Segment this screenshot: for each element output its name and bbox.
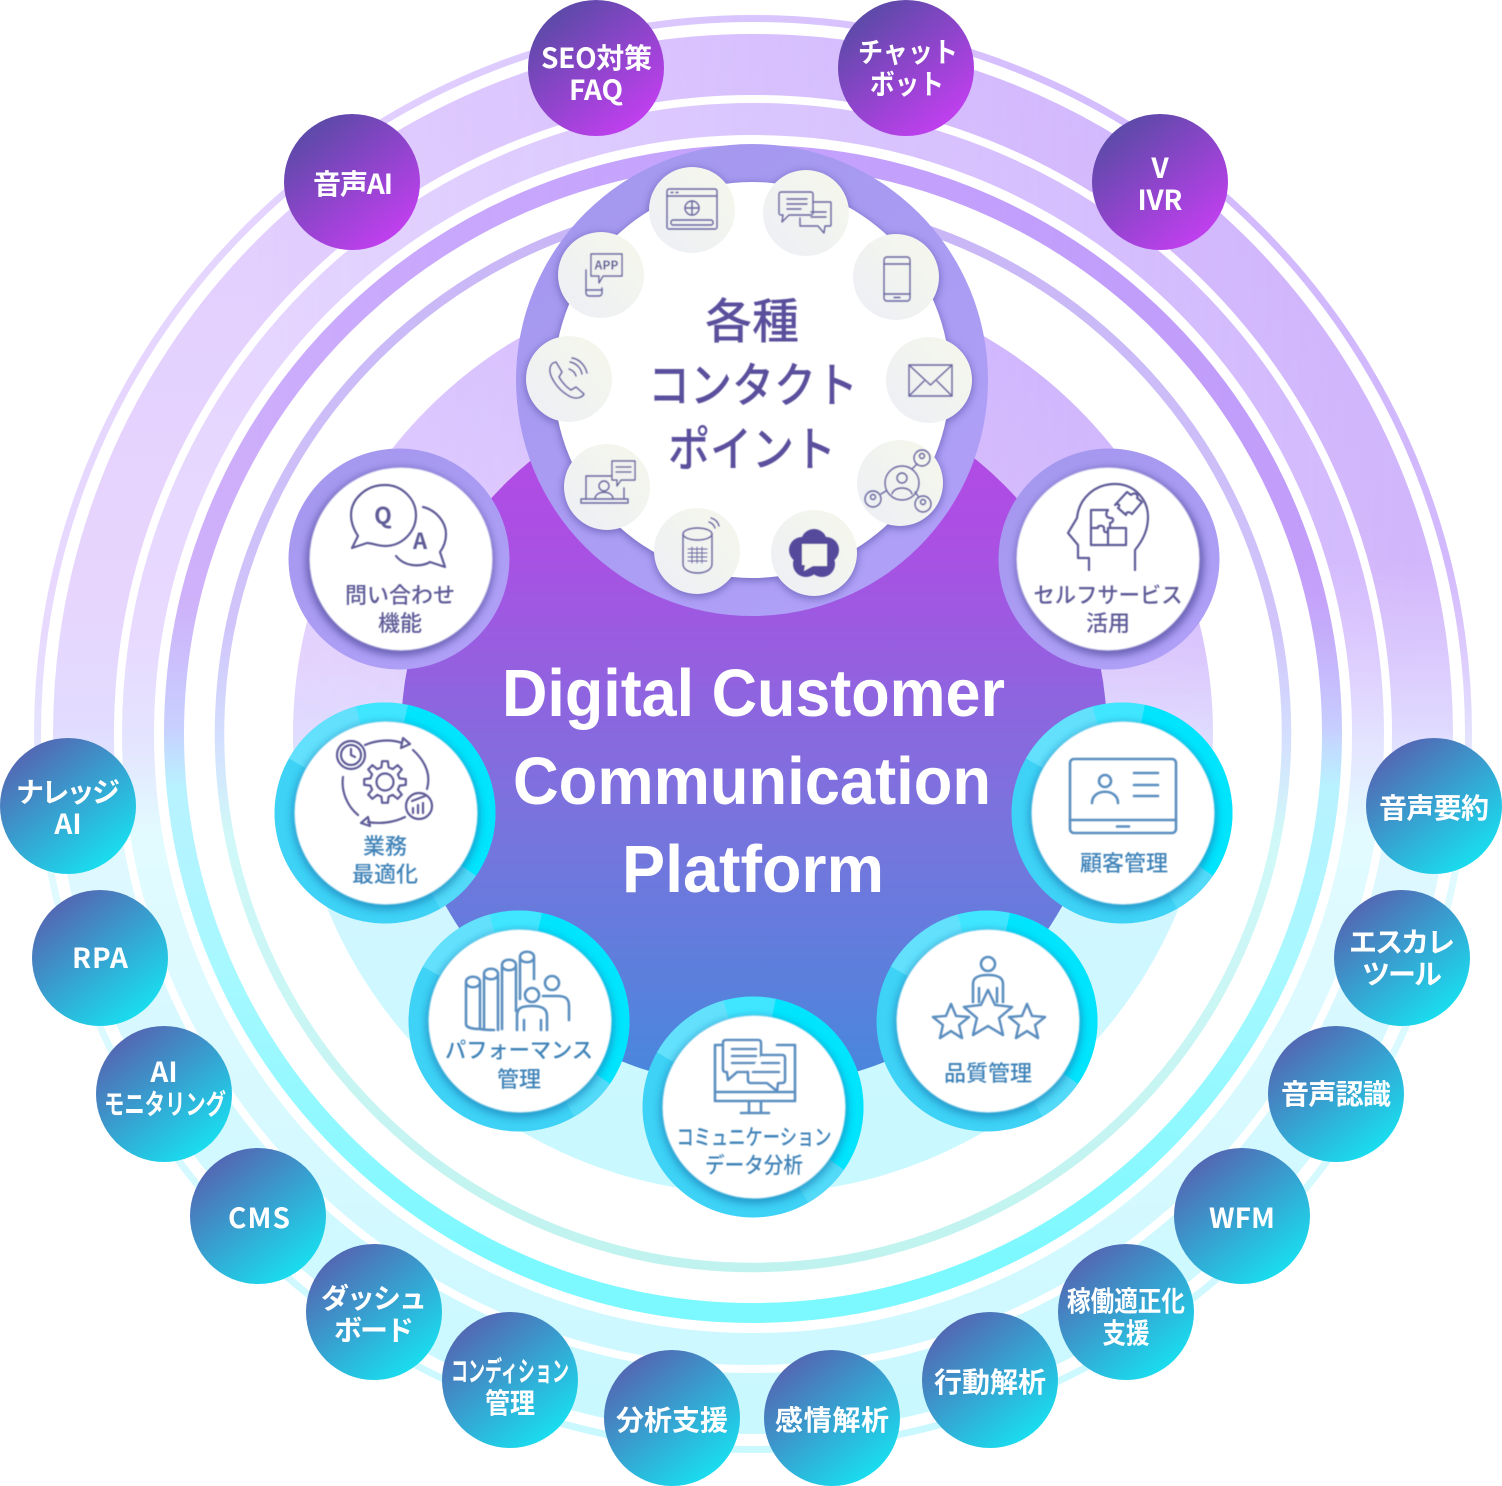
label: performance management: パフォーマンス [445,1033,593,1065]
icon: customer record monitor [1070,759,1176,833]
icon: web browser [667,189,717,229]
node: RPA: RPA [72,937,129,977]
icon: person with three stars [933,957,1045,1038]
icon: telephone [550,358,587,398]
title: Digital Customer Communication Platform: Digital Customer [502,656,1005,731]
module: customer management [981,672,1263,954]
label: self service: セルフサービス [1034,578,1182,610]
icon: bars with people [466,952,569,1030]
node: V IVR [1092,114,1228,250]
node: speech recognition [1268,1026,1404,1162]
label: operations optimisation: 最適化 [352,857,418,889]
node: CMS: CMS [228,1197,290,1237]
node: dashboard: ボード [334,1309,414,1349]
module: performance management [378,880,660,1162]
label: performance management: 管理 [497,1062,541,1094]
icon: monitor with chat bubbles [715,1040,795,1113]
node: escalation tool [1334,890,1470,1026]
pale inner disk [293,274,1213,1194]
node: RPA [32,890,168,1026]
node: condition management: コンディション [451,1350,569,1390]
node: V IVR: V [1150,147,1169,187]
contact points heading: 各種 [705,282,799,352]
node: workforce optimisation support: 稼働適正化 [1067,1280,1185,1320]
icon: smart speaker [683,518,719,573]
icon: chat bubbles [779,192,831,233]
label: inquiry: 問い合わせ [345,578,455,610]
node: knowledge AI [0,738,136,874]
module: operations optimisation [244,672,526,954]
central platform disk [401,381,1107,1087]
icon: mobile app [586,254,622,296]
label: self service: 活用 [1086,606,1130,638]
module: communication data analysis [612,966,894,1248]
module: self service [998,448,1220,670]
node: dashboard [306,1244,442,1380]
icon: Q and A bubbles [351,485,446,567]
node: chatbot: チャット [858,31,958,71]
node: AI monitoring: モニタリング [104,1083,226,1123]
node: V IVR: IVR [1138,179,1182,219]
node: chatbot: ボット [870,63,944,103]
label: operations optimisation: 業務 [363,829,407,861]
node: chatbot [838,0,974,136]
label: quality management: 品質管理 [944,1056,1032,1088]
node: analysis support: 分析支援 [616,1399,728,1439]
node: workforce optimisation support: 支援 [1102,1312,1150,1352]
node: SEO FAQ: SEO対策 [541,37,652,77]
icon: gear cycle [337,738,432,826]
icon: social network [865,450,931,512]
icon: head with puzzle [1068,484,1148,570]
node: SEO FAQ [528,0,664,136]
node: escalation tool: エスカレ [1349,921,1455,961]
node: speech summary: 音声要約 [1379,787,1489,827]
title: Digital Customer Communication Platform: Communication [513,744,991,819]
node: SEO FAQ: FAQ [569,69,623,109]
label: operations optimisation [352,829,418,889]
title: Digital Customer Communication Platform [502,656,1005,907]
icon: video call [581,461,635,503]
node: condition management: 管理 [485,1382,535,1422]
icon: mobile app: APP [594,256,618,274]
icon: smartphone [884,257,910,301]
node: knowledge AI: ナレッジ [16,771,120,811]
node: voice AI: 音声AI [313,163,393,203]
label: communication data analysis [676,1120,832,1180]
title: Digital Customer Communication Platform: Platform [622,832,884,907]
panel: contact points [516,144,988,616]
label: communication data analysis: コミュニケーション [676,1120,832,1152]
node: sentiment analysis [764,1350,900,1486]
icon: envelope [909,365,952,396]
node: escalation tool: ツール [1362,953,1442,993]
node: condition management [442,1312,578,1448]
contact points heading: ポイント [668,410,836,480]
node: sentiment analysis: 感情解析 [775,1399,889,1439]
node: dashboard: ダッシュ [321,1277,427,1317]
icon: LINE style flower speech bubble [789,529,839,577]
module: inquiry [288,448,510,670]
label: inquiry: 機能 [378,606,422,638]
node: workforce optimisation support [1058,1244,1194,1380]
icon: Q and A bubbles: A [412,524,428,556]
label: customer management: 顧客管理 [1080,846,1168,878]
icon: Q and A bubbles: Q [374,497,392,531]
label: communication data analysis: データ分析 [705,1148,803,1180]
node: analysis support [604,1350,740,1486]
node: CMS [190,1148,326,1284]
label: inquiry [345,578,455,638]
label: performance management [445,1033,593,1094]
node: speech recognition: 音声認識 [1281,1073,1391,1113]
node: knowledge AI: AI [53,803,82,843]
node: AI monitoring [96,1026,232,1162]
node: behaviour analysis: 行動解析 [934,1361,1046,1401]
node: behaviour analysis [922,1312,1058,1448]
contact points heading: コンタクト [648,346,858,416]
node: voice AI [284,114,420,250]
module: quality management [846,880,1128,1162]
node: AI monitoring: AI [149,1051,178,1091]
node: speech summary [1366,738,1502,874]
label: self service [1034,578,1182,638]
node: WFM [1174,1148,1310,1284]
node: WFM: WFM [1209,1197,1275,1237]
contact points heading [648,282,858,480]
